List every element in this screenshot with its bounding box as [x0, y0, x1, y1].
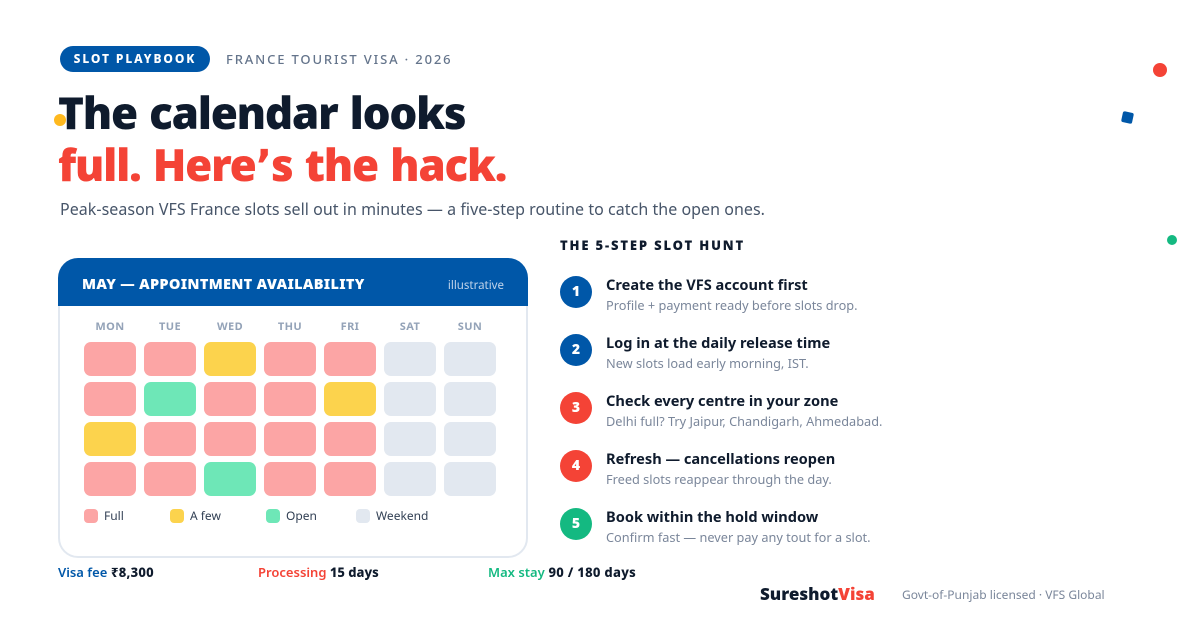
weekday labels: TUE — [159, 319, 181, 334]
step 2: New slots load early morning, IST. — [606, 354, 809, 372]
weekday labels — [95, 319, 482, 334]
weekday labels: THU — [278, 319, 302, 334]
eyebrow text: FRANCE TOURIST VISA · 2026 — [226, 50, 452, 68]
weekday labels: FRI — [341, 319, 359, 334]
decorative dot: red — [1153, 63, 1167, 77]
legend: open: Open — [286, 507, 317, 524]
weekday labels: MON — [95, 319, 125, 334]
title line 1: The calendar looks — [58, 82, 465, 142]
step 1 — [560, 275, 858, 314]
title — [58, 82, 506, 194]
icon: yellow dot — [54, 114, 66, 126]
weekday labels: WED — [217, 319, 243, 334]
weekday labels: SAT — [400, 319, 420, 334]
calendar header — [58, 258, 528, 306]
step 4 — [560, 449, 835, 488]
step 3: 3 — [572, 398, 580, 417]
stat: processing: Processing 15 days — [258, 563, 379, 581]
step 1: Create the VFS account first — [606, 275, 808, 295]
step 4: Refresh — cancellations reopen — [606, 449, 835, 469]
step 3: Delhi full? Try Jaipur, Chandigarh, Ahmedabad. — [606, 412, 882, 430]
decorative dot: green — [1167, 235, 1177, 245]
calendar grid — [84, 342, 496, 496]
step 2: Log in at the daily release time — [606, 333, 830, 353]
title line 2: full. Here’s the hack. — [58, 134, 506, 194]
step 4: 4 — [572, 456, 580, 475]
step 1: 1 — [572, 282, 580, 301]
legend: open — [266, 507, 317, 524]
stat: visa fee: Visa fee ₹8,300 — [58, 563, 154, 581]
step 1: Profile + payment ready before slots drop. — [606, 296, 858, 314]
step 5: Confirm fast — never pay any tout for a slot. — [606, 528, 871, 546]
footer note: Govt-of-Punjab licensed · VFS Global — [902, 586, 1105, 603]
step 4: Freed slots reappear through the day. — [606, 470, 832, 488]
stat: max stay: Max stay 90 / 180 days — [488, 563, 636, 581]
calendar note: illustrative — [448, 278, 504, 293]
step 3 — [560, 391, 882, 430]
legend: full: Full — [104, 507, 124, 524]
legend: full — [84, 507, 124, 524]
panel: calendar — [58, 258, 528, 558]
steps heading: THE 5-STEP SLOT HUNT — [560, 236, 745, 254]
badge: slot playbook — [60, 46, 210, 72]
step 3: Check every centre in your zone — [606, 391, 838, 411]
legend: a few — [170, 507, 221, 524]
calendar heading: MAY — APPOINTMENT AVAILABILITY — [82, 274, 365, 294]
legend: a few: A few — [190, 507, 221, 524]
step 2 — [560, 333, 830, 372]
step 5: Book within the hold window — [606, 507, 818, 527]
legend: weekend: Weekend — [376, 507, 428, 524]
step 5 — [560, 507, 871, 546]
step 5: 5 — [572, 514, 580, 533]
weekday labels: SUN — [458, 319, 482, 334]
subtitle: Peak-season VFS France slots sell out in minutes — a five-step routine to catch the open ones. — [60, 198, 765, 220]
badge: slot playbook: SLOT PLAYBOOK — [74, 50, 196, 67]
brand logo: SureshotVisa — [760, 582, 875, 605]
decorative square: blue — [1121, 111, 1134, 124]
step 2: 2 — [572, 340, 580, 359]
